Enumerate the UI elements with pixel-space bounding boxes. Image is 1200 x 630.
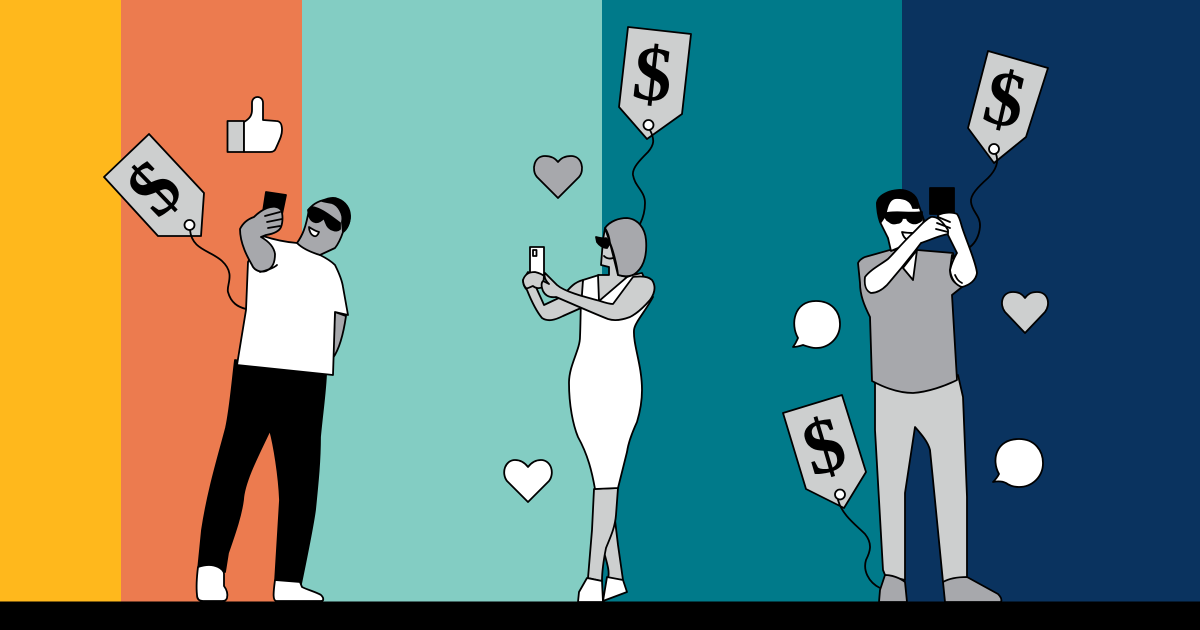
collar <box>903 250 917 280</box>
shoes <box>578 578 603 602</box>
icon: price tag middle <box>619 27 691 224</box>
arm and hand <box>240 207 282 272</box>
neck <box>598 228 627 301</box>
sunglasses <box>308 207 340 231</box>
shoes <box>879 575 907 602</box>
icon: price tag left <box>104 134 246 309</box>
icon: price tag right: $ <box>976 52 1034 145</box>
dress <box>569 273 653 489</box>
front arm <box>542 273 654 320</box>
icon: thumbs up <box>228 97 282 152</box>
front arm <box>865 217 948 293</box>
legs <box>604 520 623 580</box>
phone <box>262 192 286 224</box>
icon: gray heart <box>534 156 582 198</box>
hair <box>877 190 918 222</box>
icon: white heart <box>504 460 552 502</box>
figure: man right <box>858 188 1001 602</box>
back arm <box>333 312 346 358</box>
hair <box>605 218 646 276</box>
hand <box>523 272 544 288</box>
icon: speech bubble left <box>793 301 840 348</box>
mouth <box>309 227 319 236</box>
figure: man left <box>197 192 350 601</box>
hair <box>322 198 350 232</box>
smile <box>604 256 613 259</box>
figure: woman <box>523 218 654 602</box>
ground bar <box>0 602 1200 630</box>
sunglasses <box>885 212 922 223</box>
torso <box>858 250 962 393</box>
back arm <box>523 272 583 320</box>
trousers <box>198 360 326 584</box>
mouth <box>902 232 915 240</box>
shoes <box>197 565 227 601</box>
icon: price tag bottom: $ <box>793 398 855 493</box>
icon: price tag bottom <box>783 395 880 588</box>
phone <box>930 188 954 214</box>
phone <box>530 247 544 275</box>
trousers <box>875 375 967 582</box>
icon: price tag left: $ <box>109 143 198 232</box>
raised arm <box>950 255 962 287</box>
shirt <box>237 236 348 375</box>
sunglasses <box>596 237 610 248</box>
icon: price tag middle: $ <box>629 28 677 119</box>
head <box>297 199 350 255</box>
head <box>877 190 924 251</box>
icon: price tag right <box>968 51 1048 247</box>
icon: light heart <box>1002 292 1048 333</box>
icon: speech bubble right <box>993 439 1043 487</box>
